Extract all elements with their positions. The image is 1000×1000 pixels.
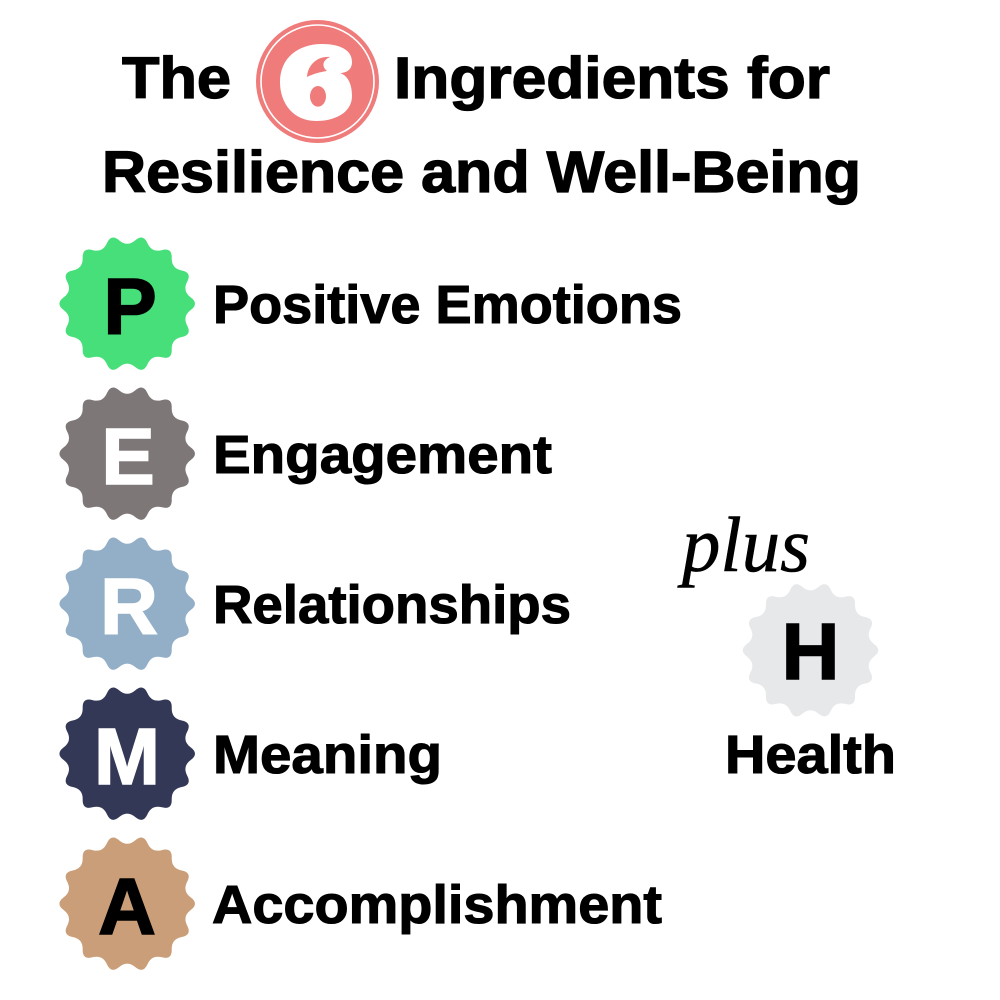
badge: R (59, 538, 195, 670)
badge: H (743, 584, 878, 716)
badge: P (59, 238, 195, 370)
label: Engagement: Engagement (213, 425, 552, 485)
plus script word: plus (677, 501, 810, 588)
title line 2: Resilience and Well-Being (102, 140, 861, 205)
title (102, 20, 861, 205)
badge: A: A (98, 862, 156, 951)
badge: M (59, 688, 195, 820)
label: Health: Health (725, 725, 896, 785)
label: Meaning: Meaning (213, 725, 442, 785)
title word: The: The (122, 46, 231, 111)
item: Positive Emotions (59, 238, 682, 370)
icon: number 6 badge (256, 20, 379, 143)
badge: P: P (103, 262, 157, 351)
label: Positive Emotions: Positive Emotions (213, 275, 682, 335)
badge: E (59, 388, 195, 520)
label: Accomplishment: Accomplishment (212, 875, 662, 935)
item: Relationships (59, 538, 571, 670)
badge: E: E (101, 412, 155, 501)
badge: A (59, 838, 195, 970)
item: Health (725, 584, 896, 785)
badge: R: R (100, 562, 158, 651)
badge: M: M (94, 712, 160, 801)
badge: H: H (782, 607, 839, 696)
icon: number 6 badge: 6 (290, 37, 342, 126)
label: Relationships: Relationships (213, 575, 571, 635)
item: Accomplishment (59, 838, 662, 970)
item: Meaning (59, 688, 442, 820)
item: Engagement (59, 388, 552, 520)
title words: Ingredients for: Ingredients for (394, 46, 830, 111)
